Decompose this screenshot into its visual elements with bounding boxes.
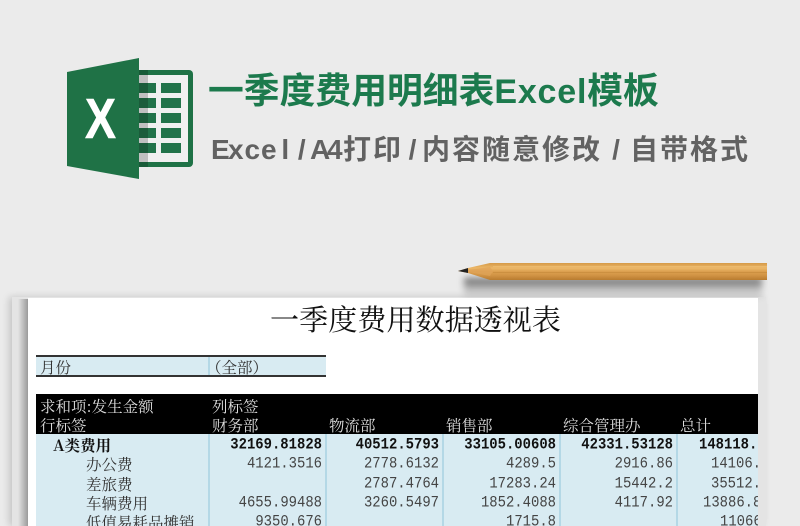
heading: subtitle: E bbox=[211, 134, 230, 165]
icon: Excel logo bbox=[67, 58, 193, 179]
table title: 一季度费用数据透视表 bbox=[270, 298, 561, 339]
heading: subtitle bbox=[211, 134, 748, 165]
row: 差旅费: 15442.2 bbox=[615, 475, 673, 493]
row: A类费用: 33105.00608 bbox=[464, 436, 556, 454]
row: 车辆费用: 3260.5497 bbox=[364, 494, 439, 512]
heading: subtitle: 印 bbox=[373, 134, 401, 165]
heading: subtitle: 容 bbox=[452, 134, 480, 165]
header row two: 财务部 bbox=[212, 414, 259, 436]
row: A类费用: A类费用 bbox=[53, 434, 111, 456]
icon: Excel logo: X bbox=[85, 87, 116, 151]
header row two bbox=[40, 414, 711, 436]
heading: subtitle: 随 bbox=[482, 134, 510, 165]
heading: subtitle: 4 bbox=[327, 134, 343, 165]
row: 办公费: 办公费 bbox=[86, 453, 133, 475]
left shadow of the top sheet bbox=[18, 299, 28, 526]
heading: subtitle: 打 bbox=[343, 134, 371, 165]
row: 车辆费用: 1852.4088 bbox=[481, 494, 556, 512]
heading: title: 一季度费用明细表Excel模板 bbox=[208, 71, 659, 111]
header row two: 销售部 bbox=[446, 414, 493, 436]
row: 办公费: 2916.86 bbox=[615, 455, 673, 473]
heading: subtitle: / bbox=[612, 134, 620, 165]
header row one: 求和项:发生金额 bbox=[40, 395, 154, 417]
heading: subtitle: c bbox=[244, 134, 260, 165]
row: A类费用 bbox=[53, 434, 758, 456]
heading: subtitle: 改 bbox=[572, 134, 600, 165]
row: 办公费: 4121.3516 bbox=[247, 455, 322, 473]
white table sheet bbox=[28, 298, 758, 526]
row: 办公费 bbox=[86, 453, 758, 475]
heading: subtitle: 式 bbox=[720, 134, 748, 165]
heading: subtitle: A bbox=[310, 134, 330, 165]
filter label: 月份 bbox=[40, 356, 71, 378]
row: 差旅费: 差旅费 bbox=[86, 473, 133, 495]
paper sheet bbox=[12, 297, 766, 526]
heading: subtitle: l bbox=[281, 134, 289, 165]
row: A类费用: 40512.5793 bbox=[356, 436, 439, 454]
row: 车辆费用: 车辆费用 bbox=[86, 492, 148, 514]
row: 办公费: 2778.6132 bbox=[364, 455, 439, 473]
header row one bbox=[40, 395, 259, 417]
icon: pencil bbox=[458, 263, 767, 280]
heading: subtitle: 内 bbox=[422, 134, 450, 165]
row: 差旅费: 17283.24 bbox=[489, 475, 556, 493]
filter row bbox=[36, 355, 326, 377]
header row one: 列标签 bbox=[212, 395, 259, 417]
row: A类费用: 32169.81828 bbox=[230, 436, 322, 454]
heading: subtitle: 带 bbox=[660, 134, 688, 165]
pencil shadow bbox=[464, 278, 762, 298]
row: 办公费: 4289.5 bbox=[506, 455, 556, 473]
row: 差旅费: 2787.4764 bbox=[364, 475, 439, 493]
heading: subtitle: e bbox=[261, 134, 277, 165]
heading: subtitle: 修 bbox=[542, 134, 570, 165]
header row two: 物流部 bbox=[329, 414, 376, 436]
pivot table header bbox=[36, 394, 758, 434]
row: A类费用: 42331.53128 bbox=[581, 436, 673, 454]
row: 低值易耗品摊销 bbox=[86, 511, 758, 526]
heading: subtitle: 自 bbox=[630, 134, 658, 165]
heading: subtitle: x bbox=[228, 134, 244, 165]
row: 车辆费用: 4117.92 bbox=[615, 494, 673, 512]
row: 车辆费用 bbox=[86, 492, 758, 514]
header row two: 行标签 bbox=[40, 414, 87, 436]
filter divider bbox=[208, 357, 210, 375]
header row two: 总计 bbox=[680, 414, 711, 436]
heading: subtitle: 意 bbox=[512, 134, 540, 165]
heading: subtitle: / bbox=[409, 134, 416, 165]
header row two: 综合管理办 bbox=[563, 414, 641, 436]
row: 车辆费用: 4655.99488 bbox=[239, 494, 322, 512]
heading: subtitle: 格 bbox=[690, 134, 718, 165]
heading: subtitle: / bbox=[298, 134, 306, 165]
row: 差旅费 bbox=[86, 473, 758, 495]
filter value: （全部） bbox=[206, 356, 268, 378]
